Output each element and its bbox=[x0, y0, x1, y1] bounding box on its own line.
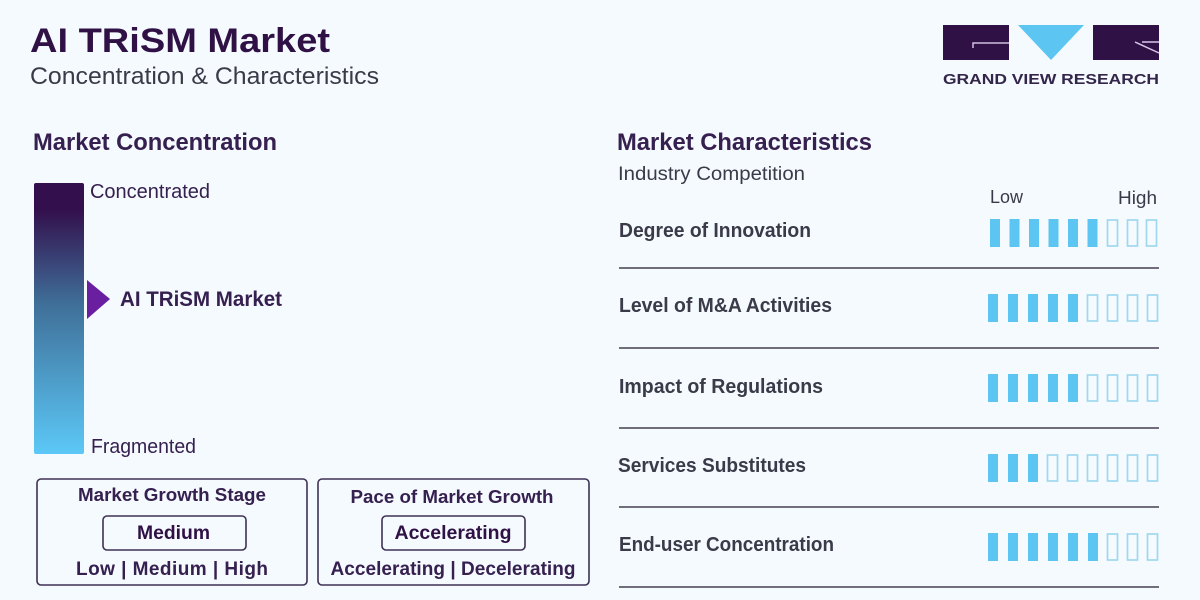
logo: Grand View Research bbox=[943, 25, 1159, 88]
scale labels bbox=[990, 187, 1157, 208]
row: end-user concentration: End-user Concentration bbox=[619, 534, 834, 556]
title bbox=[30, 22, 379, 90]
panel: market growth stage bbox=[37, 479, 307, 585]
row: level of M&A activities bbox=[619, 294, 1158, 322]
panel: pace of market growth: Accelerating bbox=[394, 523, 512, 544]
panel: market growth stage: Market Growth Stage bbox=[78, 484, 266, 505]
row: services substitutes: Services Substitutes bbox=[618, 455, 806, 477]
row: degree of innovation bbox=[619, 219, 1156, 247]
logo: Grand View Research: GRAND VIEW RESEARCH bbox=[943, 72, 1159, 88]
panel: market growth stage: Medium bbox=[137, 523, 210, 544]
subheading: industry competition: Industry Competition bbox=[618, 164, 805, 185]
row: impact of regulations: Impact of Regulations bbox=[619, 376, 823, 398]
label: concentrated: Concentrated bbox=[90, 181, 210, 203]
heading: market concentration: Market Concentration bbox=[33, 129, 277, 156]
marker label: AI TRiSM Market bbox=[120, 288, 282, 311]
row: degree of innovation: Degree of Innovation bbox=[619, 220, 811, 242]
scale labels: High bbox=[1118, 188, 1157, 208]
row: level of M&A activities: Level of M&A Activities bbox=[619, 295, 832, 317]
label: fragmented: Fragmented bbox=[91, 436, 196, 458]
heading: market characteristics: Market Characteristics bbox=[617, 129, 872, 156]
row: services substitutes bbox=[618, 454, 1158, 482]
panel: pace of market growth bbox=[318, 479, 589, 585]
row: impact of regulations bbox=[619, 374, 1158, 402]
title: Concentration & Characteristics bbox=[30, 63, 379, 90]
marker arrow bbox=[87, 280, 110, 319]
panel: pace of market growth: Pace of Market Growth bbox=[350, 486, 554, 507]
concentration gradient bar bbox=[34, 183, 84, 454]
panel: pace of market growth: Accelerating | Decelerating bbox=[330, 559, 576, 580]
row: end-user concentration bbox=[619, 533, 1158, 561]
scale labels: Low bbox=[990, 187, 1024, 207]
panel: market growth stage: Low | Medium | High bbox=[76, 559, 268, 580]
title: AI TRiSM Market bbox=[30, 22, 330, 60]
